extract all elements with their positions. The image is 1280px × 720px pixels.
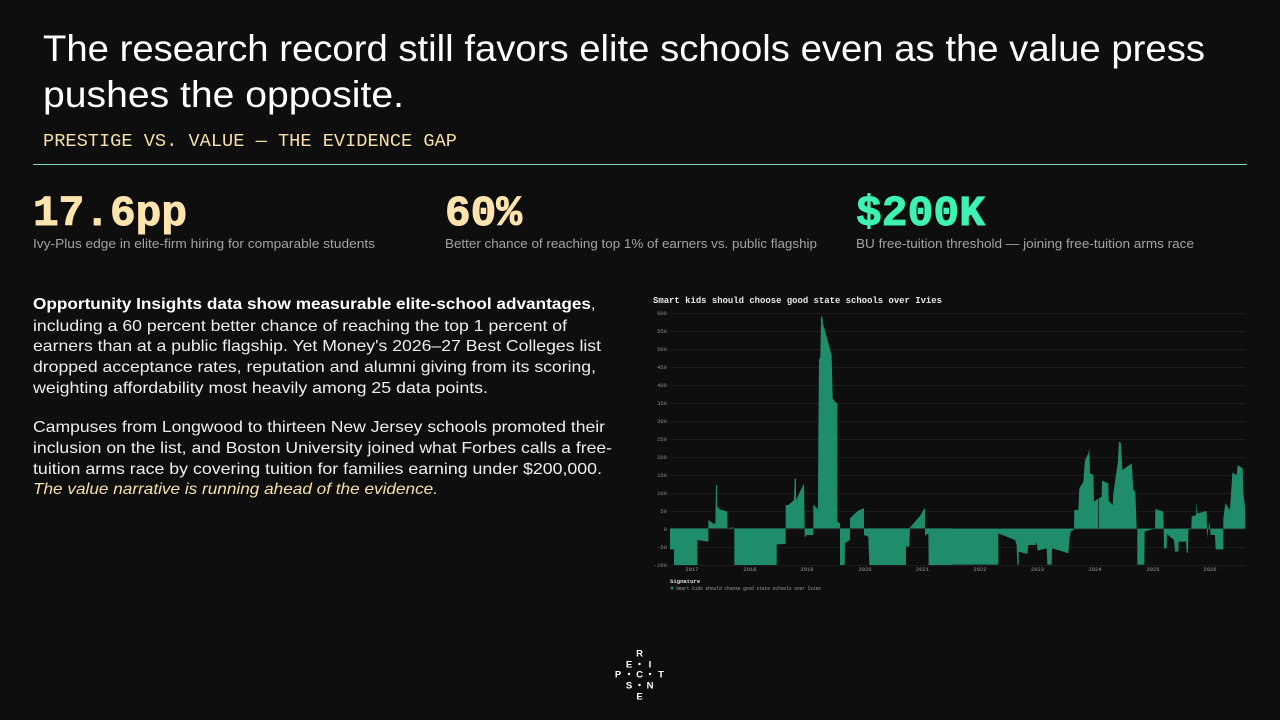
text block: first paragraph: weighting affordability most heavily among 25 data points. [32,380,488,397]
x axis labels: 2021 [916,566,930,573]
title: pushes the opposite. [43,74,404,115]
logo: Price Intense letter cross [615,648,664,702]
legend: Smart kids should choose good state schools over Ivies [676,586,821,592]
logo: Price Intense letter cross: P [615,670,622,680]
text block: first paragraph [32,296,602,397]
stat: 17.6pp: Ivy-Plus edge in elite-firm hiring for comparable students [33,237,375,251]
text block: first paragraph: Opportunity Insights data show measurable elite-school advantages [33,296,591,313]
stat: $200K: $200K [856,189,985,238]
stat: $200K [856,189,1194,251]
text block: first paragraph: , [591,296,595,313]
stat: 17.6pp: 17.6pp [33,189,187,238]
y axis labels: 150 [657,472,667,479]
text block: first paragraph: earners than at a public flagship. Yet Money's 2026–27 Best Colleges list [33,338,602,355]
text block: first paragraph: dropped acceptance rates, reputation and alumni giving from its scoring, [33,359,596,376]
x axis labels [685,566,1217,573]
x axis labels: 2023 [1031,566,1044,573]
x axis labels: 2022 [973,566,987,573]
y axis labels: 250 [657,436,667,443]
x axis labels: 2020 [858,566,872,573]
logo: Price Intense letter cross: E [636,692,643,702]
y axis labels: 550 [657,328,667,335]
text block: second paragraph: The value narrative is running ahead of the evidence. [33,481,438,498]
subtitle: PRESTIGE VS. VALUE — THE EVIDENCE GAP [43,130,457,152]
stat: 60%: Better chance of reaching top 1% of earners vs. public flagship [445,237,817,251]
legend: Signature [670,578,701,585]
y axis labels: 500 [657,346,667,353]
area series 2017–2022 [670,317,952,565]
y axis labels: -50 [657,544,667,551]
x axis labels: 2018 [743,566,757,573]
stat: $200K: BU free-tuition threshold — joining free-tuition arms race [856,237,1194,251]
stat: 17.6pp [33,189,375,251]
chart title: Smart kids should choose good state schools over Ivies [653,296,942,306]
text block: second paragraph: tuition arms race by covering tuition for families earning under $200,000. [33,461,602,478]
x axis labels: 2026 [1203,566,1217,573]
logo: Price Intense letter cross: C [636,670,643,680]
y axis labels: 450 [657,364,667,371]
y axis labels: 400 [657,382,667,389]
y axis labels: 300 [657,418,667,425]
logo: Price Intense letter cross: S [626,680,632,692]
stat: 60% [445,189,817,251]
y axis labels: -100 [654,562,667,569]
logo: Price Intense letter cross: N [647,680,654,692]
x axis labels: 2019 [800,566,814,573]
x axis labels: 2017 [685,566,699,573]
text block: first paragraph: including a 60 percent better chance of reaching the top 1 percent of [33,318,568,335]
chart: signature area chart [653,296,1245,592]
area series 2022–2026 [948,442,1245,565]
logo: Price Intense letter cross: T [658,670,664,680]
logo: Price Intense letter cross: I [649,660,651,670]
x axis labels: 2025 [1146,566,1160,573]
legend [670,578,821,592]
title: The research record still favors elite schools even as the value press [43,28,1205,69]
text block: second paragraph: Campuses from Longwood to thirteen New Jersey schools promoted their [33,419,606,436]
y axis labels: 200 [657,454,667,461]
logo: Price Intense letter cross: R [636,648,643,660]
y axis labels: 100 [657,490,667,497]
y axis labels: 0 [664,526,667,533]
y axis labels: 350 [657,400,667,407]
logo: Price Intense letter cross: E [626,660,632,670]
text block: second paragraph [33,419,612,498]
text block: second paragraph: inclusion on the list, and Boston University joined what Forbes calls a free- [33,440,612,457]
x axis labels: 2024 [1088,566,1102,573]
y axis labels: 50 [660,508,667,515]
y axis labels: 600 [657,310,667,317]
title [43,28,1205,115]
stat: 60%: 60% [445,189,522,238]
y axis labels [654,310,667,569]
